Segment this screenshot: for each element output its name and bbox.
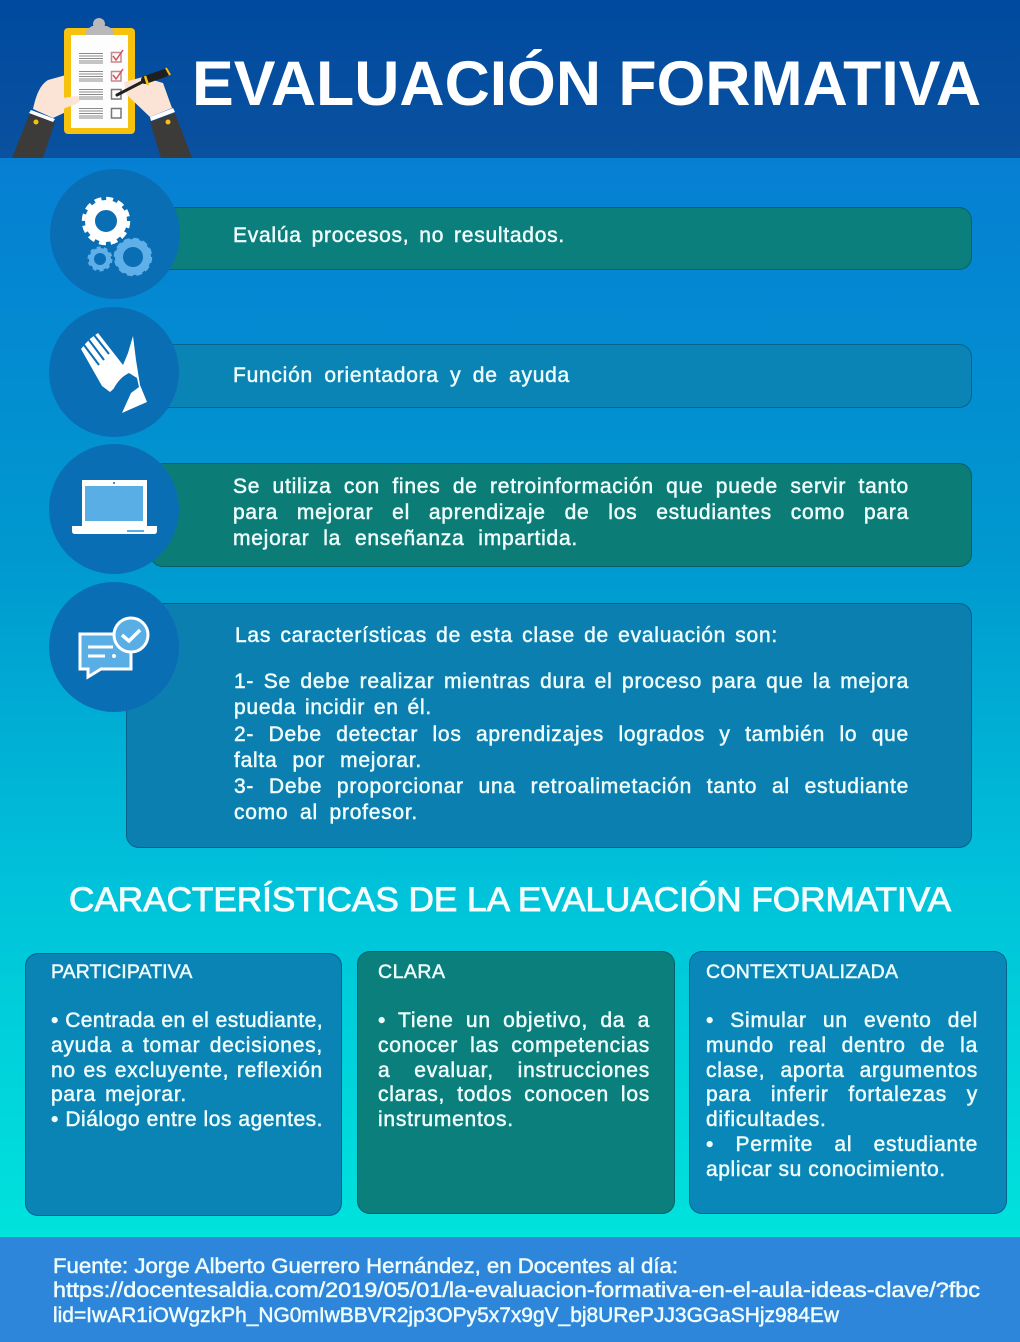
text: clara: a evaluar, instrucciones [378, 1059, 650, 1082]
panel: contextualizada [689, 951, 1007, 1214]
text: contextualizada: • Simular un evento del [706, 1009, 978, 1032]
text: contextualizada: para inferir fortalezas y [706, 1083, 978, 1106]
icon: helping hands [49, 307, 179, 437]
panel: procesos [150, 207, 972, 270]
text: características list: como al profesor. [234, 801, 418, 824]
text: contextualizada [706, 1009, 978, 1181]
text: source: Fuente: Jorge Alberto Guerrero Hernández, en Docentes al día: [53, 1255, 678, 1278]
text: source [53, 1255, 980, 1327]
title: EVALUACIÓN FORMATIVA [192, 49, 981, 119]
text: participativa [51, 1009, 323, 1131]
icon: chat bubble with check [49, 582, 179, 712]
panel: retroinformación [150, 463, 972, 567]
text: características list [234, 624, 909, 824]
text: participativa: • Diálogo entre los agentes. [51, 1108, 323, 1131]
text: source: https://docentesaldia.com/2019/05/01/la-evaluacion-formativa-en-el-aula-ideas-clave/?fbc [53, 1279, 980, 1302]
text: características list: pueda incidir en él. [234, 696, 432, 719]
heading: contextualizada: CONTEXTUALIZADA [706, 961, 898, 983]
heading: participativa: PARTICIPATIVA [51, 961, 192, 983]
text: clara [378, 1009, 650, 1131]
text: evalúa procesos: Evalúa procesos, no resultados. [233, 224, 565, 247]
text: características list: falta por mejorar. [234, 749, 422, 772]
text: participativa: no es excluyente, reflexión [51, 1059, 323, 1082]
panel: características list [126, 603, 972, 848]
text: características list: Las características de esta clase de evaluación son: [235, 624, 778, 647]
text: clara: • Tiene un objetivo, da a [378, 1009, 650, 1032]
panel: participativa [25, 953, 342, 1216]
text: contextualizada: dificultades. [706, 1108, 827, 1131]
text: clara: claras, todos conocen los [378, 1083, 650, 1106]
text: clara: conocer las competencias [378, 1034, 650, 1057]
panel: función orientadora [150, 344, 972, 408]
text: contextualizada: aplicar su conocimiento. [706, 1158, 946, 1181]
icon: gears [50, 169, 180, 299]
text: función orientadora: Función orientadora y de ayuda [233, 364, 570, 387]
text: source: lid=IwAR1iOWgzkPh_NG0mIwBBVR2jp3OPy5x7x9gV_bj8URePJJ3GGaSHjz984Ew [53, 1304, 840, 1327]
text: características list: 2- Debe detectar los aprendizajes logrados y también lo que [234, 723, 909, 746]
heading: clara: CLARA [378, 961, 446, 983]
text: retroinformación: mejorar la enseñanza impartida. [233, 527, 578, 550]
text: participativa: • Centrada en el estudiante, [51, 1009, 323, 1032]
text: retroinformación: para mejorar el aprendizaje de los estudiantes como para [233, 501, 909, 524]
text: retroinformación: Se utiliza con fines de retroinformación que puede servir tanto [233, 475, 909, 498]
text: retroinformación [233, 475, 909, 550]
icon: laptop [49, 444, 179, 574]
heading: características: CARACTERÍSTICAS DE LA EVALUACIÓN FORMATIVA [69, 881, 951, 919]
text: características list: 1- Se debe realizar mientras dura el proceso para que la mejora [234, 670, 909, 693]
footer band [0, 1237, 1020, 1342]
text: contextualizada: clase, aporta argumentos [706, 1059, 978, 1082]
text: clara: instrumentos. [378, 1108, 514, 1131]
header band [0, 0, 1020, 158]
text: características list: 3- Debe proporcionar una retroalimetación tanto al estudiante [234, 775, 909, 798]
text: contextualizada: • Permite al estudiante [706, 1133, 978, 1156]
text: participativa: para mejorar. [51, 1083, 187, 1106]
illustration: hands on a checklist clipboard [12, 18, 192, 158]
text: participativa: ayuda a tomar decisiones, [51, 1034, 323, 1057]
panel: clara [357, 951, 675, 1214]
text: contextualizada: mundo real dentro de la [706, 1034, 978, 1057]
